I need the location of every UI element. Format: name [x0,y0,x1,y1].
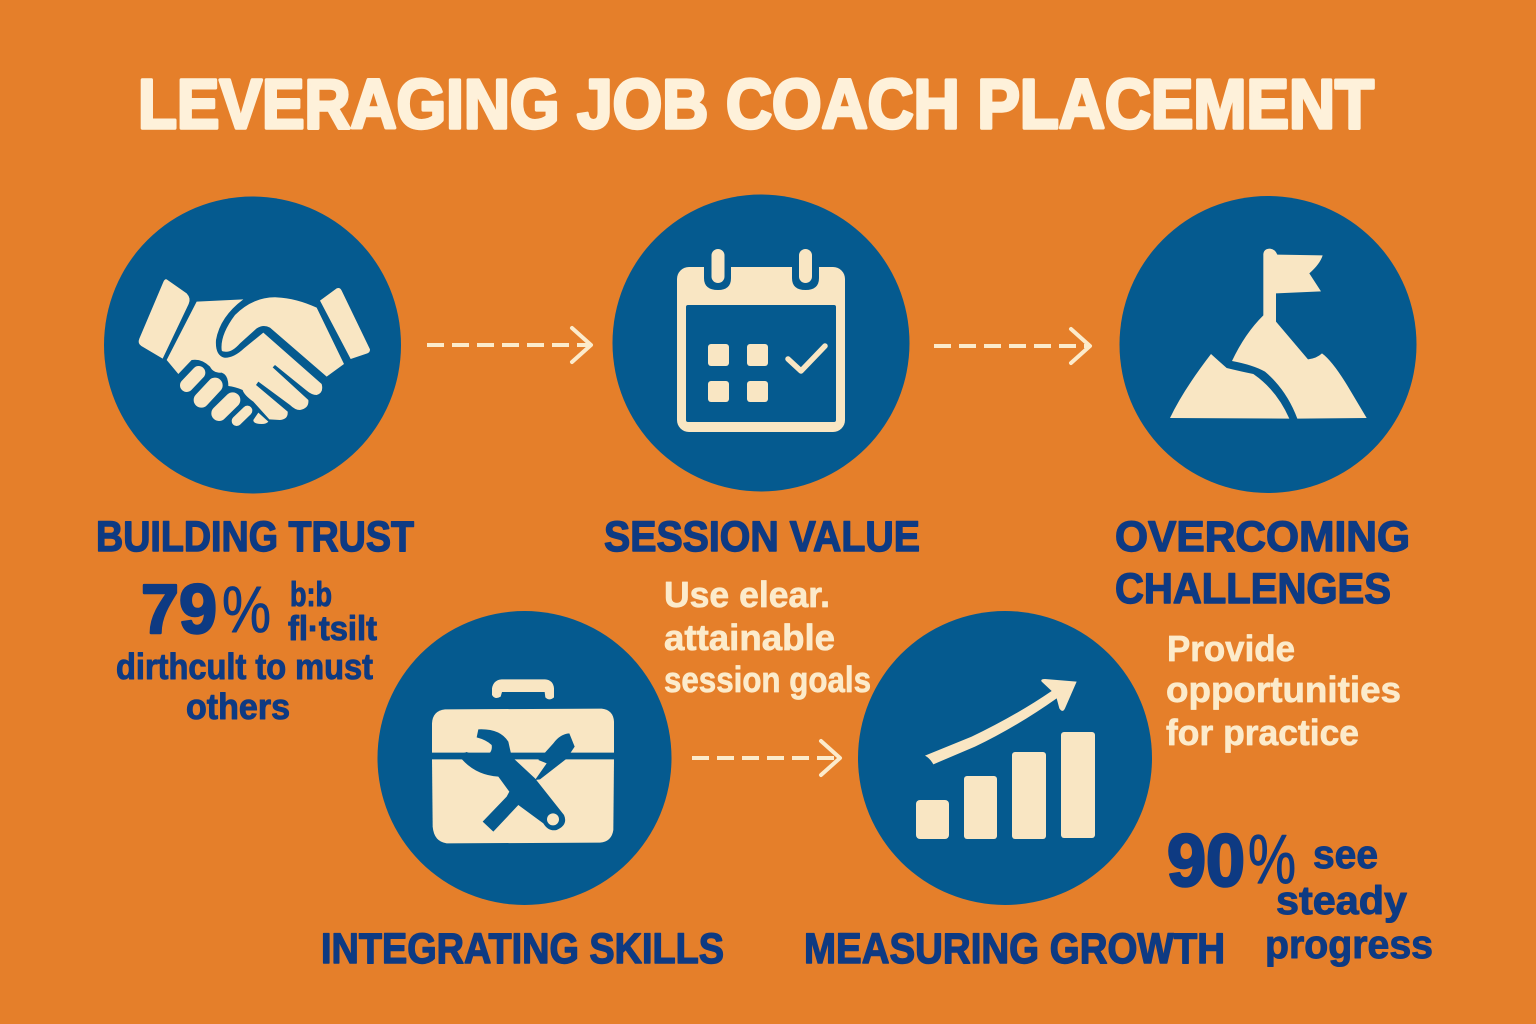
icon circle: integrating skills [378,611,672,905]
icon: handshake [139,279,370,424]
stat: 90 percent: 90 [1167,819,1245,902]
heading: overcoming challenges: CHALLENGES [1115,565,1391,613]
heading: overcoming challenges [1115,513,1410,613]
text block: practice opportunities: for practice [1166,712,1359,753]
icon circle: session value [612,194,910,492]
arrow: skills to growth [692,741,840,775]
title: LEVERAGING JOB COACH PLACEMENT [138,65,1374,143]
icon: mountain with flag [1170,249,1367,419]
panel: overcoming challenges [1115,196,1416,613]
text block: practice opportunities: Provide [1167,628,1295,669]
heading: measuring growth: MEASURING GROWTH [804,925,1225,973]
panel: building trust [96,196,414,727]
icon: rising bar chart [916,679,1095,839]
heading: session value: SESSION VALUE [604,513,920,561]
text block: session goals [664,574,871,700]
icon circle: measuring growth [858,611,1152,905]
heading: integrating skills: INTEGRATING SKILLS [321,925,724,973]
arrow: session to challenges [934,329,1090,363]
stat: 79 percent: b:b [290,576,332,614]
stat: 90 percent: % [1248,820,1296,898]
text block: practice opportunities: opportunities [1166,669,1401,710]
text block: session goals: session goals [664,659,871,700]
text block: practice opportunities [1166,628,1401,753]
stat: 79 percent: 79 [141,570,217,648]
text block: stat description: dirthcult to must [116,646,373,687]
panel: measuring growth [804,611,1433,973]
icon: calendar [677,249,845,432]
icon circle: overcoming challenges [1120,196,1416,493]
text block: session goals: attainable [664,617,835,658]
stat: 90 percent: steady [1276,879,1408,923]
heading: overcoming challenges: OVERCOMING [1115,513,1410,561]
stat: 79 percent [141,570,377,648]
panel: integrating skills [321,611,724,973]
text block: stat description [116,646,373,727]
stat: 79 percent: % [222,572,271,646]
panel: session value [604,194,920,700]
heading: building trust: BUILDING TRUST [96,513,414,561]
text block: session goals: Use elear. [664,574,830,615]
stat: 90 percent [1167,819,1433,967]
stat: 90 percent: progress [1265,923,1433,967]
icon: toolbox with tools [432,679,614,843]
text block: stat description: others [186,686,290,727]
stat: 90 percent: see [1313,833,1378,877]
stat: 79 percent: fl·tsilt [288,610,377,648]
icon circle: building trust [104,196,401,494]
arrow: trust to session [427,328,591,362]
